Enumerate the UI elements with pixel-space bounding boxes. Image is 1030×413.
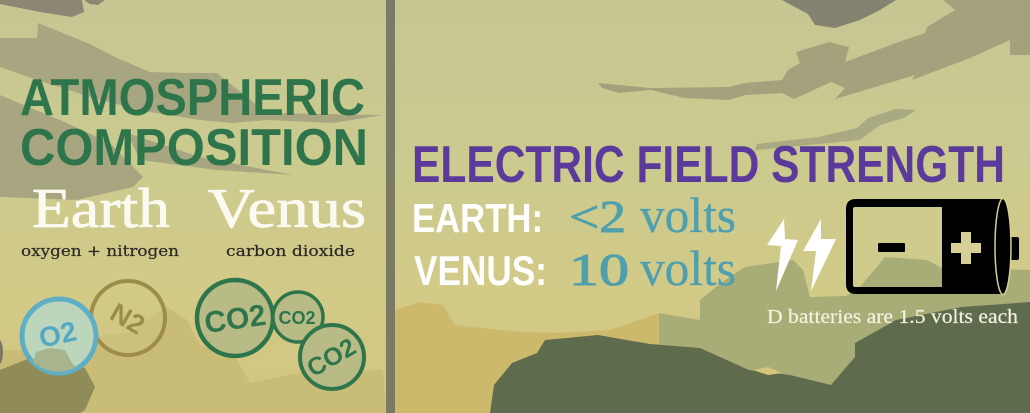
text: Earth voltage: EARTH:	[412, 195, 543, 241]
text: Venus voltage: 10	[569, 244, 629, 295]
icon: medium CO2 molecule	[273, 292, 323, 342]
text: Venus voltage	[414, 250, 734, 286]
panel: atmospheric composition	[0, 0, 386, 413]
icon: large CO2 molecule: CO2	[202, 299, 268, 340]
column: Venus label: Venus	[208, 178, 366, 240]
column: Venus label	[208, 190, 364, 256]
divider between panels	[386, 0, 395, 413]
caption: D batteries: D batteries are 1.5 volts each	[767, 306, 1018, 328]
text: Venus voltage: volts	[640, 240, 736, 296]
column: Venus label: carbon dioxide	[226, 242, 355, 260]
text: Venus voltage: VENUS:	[414, 247, 547, 294]
panel: electric field strength	[395, 0, 1030, 413]
heading: atmospheric composition: ATMOSPHERIC	[20, 69, 365, 127]
text: Earth voltage	[414, 197, 734, 233]
column: Earth label: oxygen + nitrogen	[21, 242, 179, 260]
text: Earth voltage: volts	[640, 187, 736, 243]
heading: atmospheric composition: COMPOSITION	[20, 119, 368, 177]
heading: atmospheric composition	[21, 78, 365, 166]
text: Earth voltage: <2	[569, 191, 626, 242]
icon: battery	[846, 198, 1019, 294]
icon: large CO2 molecule	[197, 280, 273, 356]
icon: small CO2 molecule: CO2	[302, 333, 361, 383]
icon: O2 molecule: O2	[36, 315, 79, 354]
icon: medium CO2 molecule: CO2	[278, 308, 316, 328]
icon: O2 molecule	[22, 299, 96, 373]
icon: N2 molecule: N2	[105, 297, 150, 340]
icon: N2 molecule	[91, 281, 165, 355]
column: Earth label: Earth	[32, 178, 170, 240]
icon: lightning bolts	[767, 219, 836, 291]
column: Earth label	[22, 187, 179, 260]
